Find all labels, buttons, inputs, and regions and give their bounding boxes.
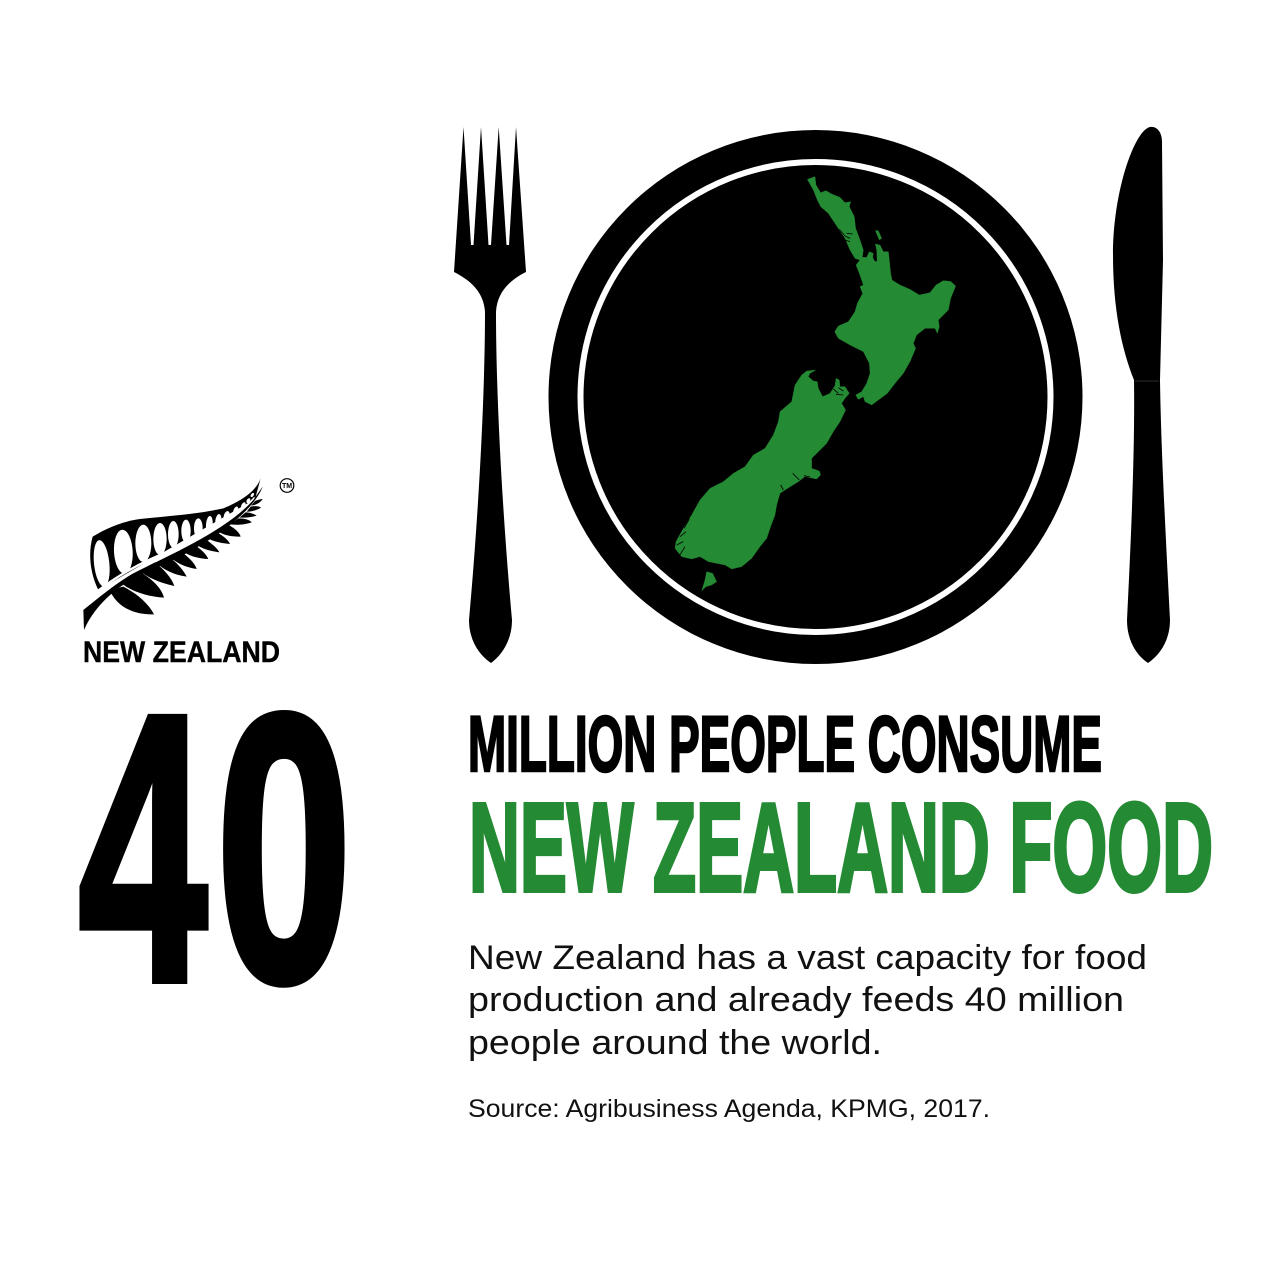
South Island: [675, 370, 849, 591]
big number: 40: 4: [78, 635, 209, 1061]
logo: silver fern New Zealand: [83, 478, 294, 669]
icon: trademark: [280, 479, 294, 492]
body text: people around the world.: [468, 1024, 882, 1062]
North Island: [807, 177, 956, 405]
body text: production and already feeds 40 million: [468, 981, 1124, 1019]
body text: [468, 939, 1147, 1062]
icon: trademark: TM: [282, 483, 292, 490]
Stewart Island: [702, 572, 717, 591]
map: New Zealand: [675, 177, 956, 591]
logo wordmark: NEW ZEALAND: [83, 636, 280, 669]
plate: [548, 130, 1082, 664]
icon: knife: [1113, 127, 1170, 663]
source note: Source: Agribusiness Agenda, KPMG, 2017.: [468, 1095, 990, 1123]
big number: 40: 0: [216, 635, 352, 1061]
icon: silver fern: [83, 478, 263, 630]
icon: fork: [454, 127, 526, 663]
body text: New Zealand has a vast capacity for food: [468, 939, 1147, 977]
